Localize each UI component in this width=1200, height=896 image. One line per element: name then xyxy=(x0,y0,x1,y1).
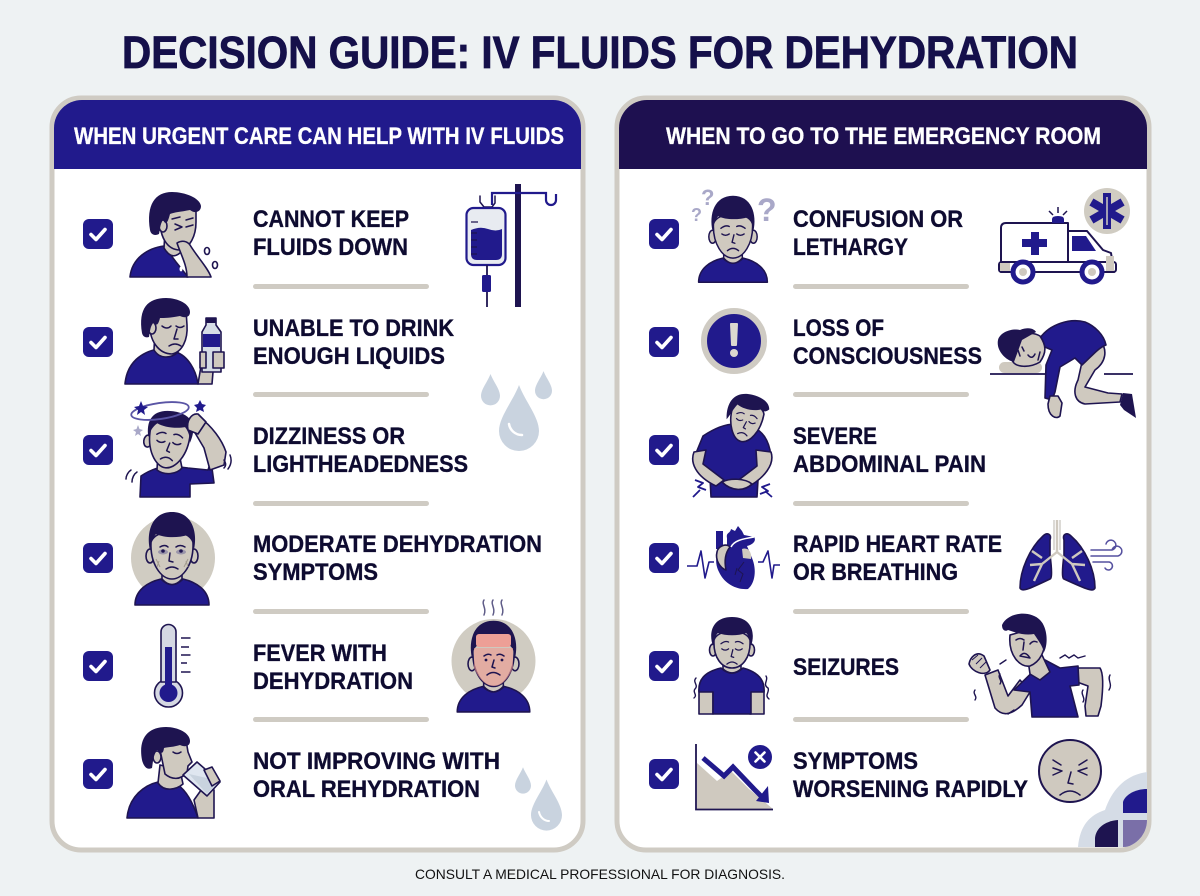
item: dizziness xyxy=(253,423,468,478)
panel: when to go to the emergency room xyxy=(617,98,1149,850)
item: symptoms worsening: SYMPTOMS xyxy=(793,748,918,775)
item: moderate dehydration: SYMPTOMS xyxy=(253,559,378,586)
item: fever: DEHYDRATION xyxy=(253,668,413,695)
item: unable to drink: UNABLE TO DRINK xyxy=(253,315,454,342)
icon: water drops xyxy=(481,371,552,451)
item: unable to drink: ENOUGH LIQUIDS xyxy=(253,343,445,370)
panel card xyxy=(617,98,1149,850)
item: moderate dehydration xyxy=(253,531,542,586)
icon: heart with pulse lines xyxy=(687,526,780,589)
item: not improving: NOT IMPROVING WITH xyxy=(253,748,500,775)
panel card xyxy=(52,98,583,850)
item: confusion xyxy=(793,206,963,261)
icon: person shaking xyxy=(694,617,769,714)
icon: confused person xyxy=(691,185,777,282)
icon: ambulance xyxy=(999,188,1130,282)
icon: confused person: ? xyxy=(691,205,702,225)
item: loss of consciousness: CONSCIOUSNESS xyxy=(793,343,982,370)
item: rapid heart rate xyxy=(793,531,1002,586)
icon: person with seizure xyxy=(969,614,1110,717)
item: cannot keep fluids down xyxy=(253,206,409,261)
item: rapid heart rate: RAPID HEART RATE xyxy=(793,531,1002,558)
panel heading: WHEN TO GO TO THE EMERGENCY ROOM xyxy=(666,123,1101,150)
item: symptoms worsening xyxy=(793,748,1028,803)
icon: small water drops xyxy=(515,767,562,831)
item: seizures: SEIZURES xyxy=(793,654,899,681)
item: fever: FEVER WITH xyxy=(253,640,387,667)
footer disclaimer: CONSULT A MEDICAL PROFESSIONAL FOR DIAGNOSIS. xyxy=(415,866,785,882)
item: not improving: ORAL REHYDRATION xyxy=(253,776,480,803)
item: abdominal pain: SEVERE xyxy=(793,423,877,450)
item: confusion: CONFUSION OR xyxy=(793,206,963,233)
icon: person with moderate dehydration xyxy=(131,512,215,605)
item: unable to drink xyxy=(253,315,454,370)
icon: lungs with airflow xyxy=(1020,520,1122,590)
item: dizziness: DIZZINESS OR xyxy=(253,423,405,450)
item: confusion: LETHARGY xyxy=(793,234,908,261)
row dividers xyxy=(253,284,429,722)
icon: person with abdominal pain xyxy=(693,390,772,497)
item: loss of consciousness: LOSS OF xyxy=(793,315,884,342)
icon: confused person: ? xyxy=(757,192,777,228)
icon: dizzy person xyxy=(126,399,231,497)
checkbox column xyxy=(83,219,113,789)
item: rapid heart rate: OR BREATHING xyxy=(793,559,958,586)
item: cannot keep fluids down: FLUIDS DOWN xyxy=(253,234,408,261)
panel heading: WHEN URGENT CARE CAN HELP WITH IV FLUIDS xyxy=(74,123,564,150)
item: abdominal pain: ABDOMINAL PAIN xyxy=(793,451,986,478)
title: DECISION GUIDE: IV FLUIDS FOR DEHYDRATION xyxy=(122,27,1078,78)
item: loss of consciousness xyxy=(793,315,982,370)
logo mark in corner xyxy=(1078,772,1147,847)
icon: confused person: ? xyxy=(701,185,714,210)
icon: thermometer xyxy=(154,624,190,707)
icon: worsening trend chart xyxy=(696,744,773,810)
icon: person with water bottle xyxy=(125,298,224,384)
item: not improving xyxy=(253,748,500,803)
item: dizziness: LIGHTHEADEDNESS xyxy=(253,451,468,478)
panel: when urgent care can help xyxy=(52,98,583,850)
icon: unconscious person xyxy=(990,321,1136,418)
item: symptoms worsening: WORSENING RAPIDLY xyxy=(793,776,1028,803)
panel header bar xyxy=(54,100,581,169)
icon: exclamation alert xyxy=(704,311,764,371)
panel header bar xyxy=(619,100,1147,169)
item: moderate dehydration: MODERATE DEHYDRATION xyxy=(253,531,542,558)
icon: person drinking water xyxy=(127,727,220,818)
item: fever xyxy=(253,640,413,695)
icon: distressed face xyxy=(1039,740,1101,802)
item: cannot keep fluids down: CANNOT KEEP xyxy=(253,206,409,233)
icon: person vomiting xyxy=(130,192,218,277)
item: abdominal pain xyxy=(793,423,986,478)
icon: person with fever xyxy=(452,600,536,712)
icon: IV bag on pole xyxy=(466,184,556,307)
row dividers xyxy=(793,284,969,722)
checkbox column xyxy=(649,219,679,789)
